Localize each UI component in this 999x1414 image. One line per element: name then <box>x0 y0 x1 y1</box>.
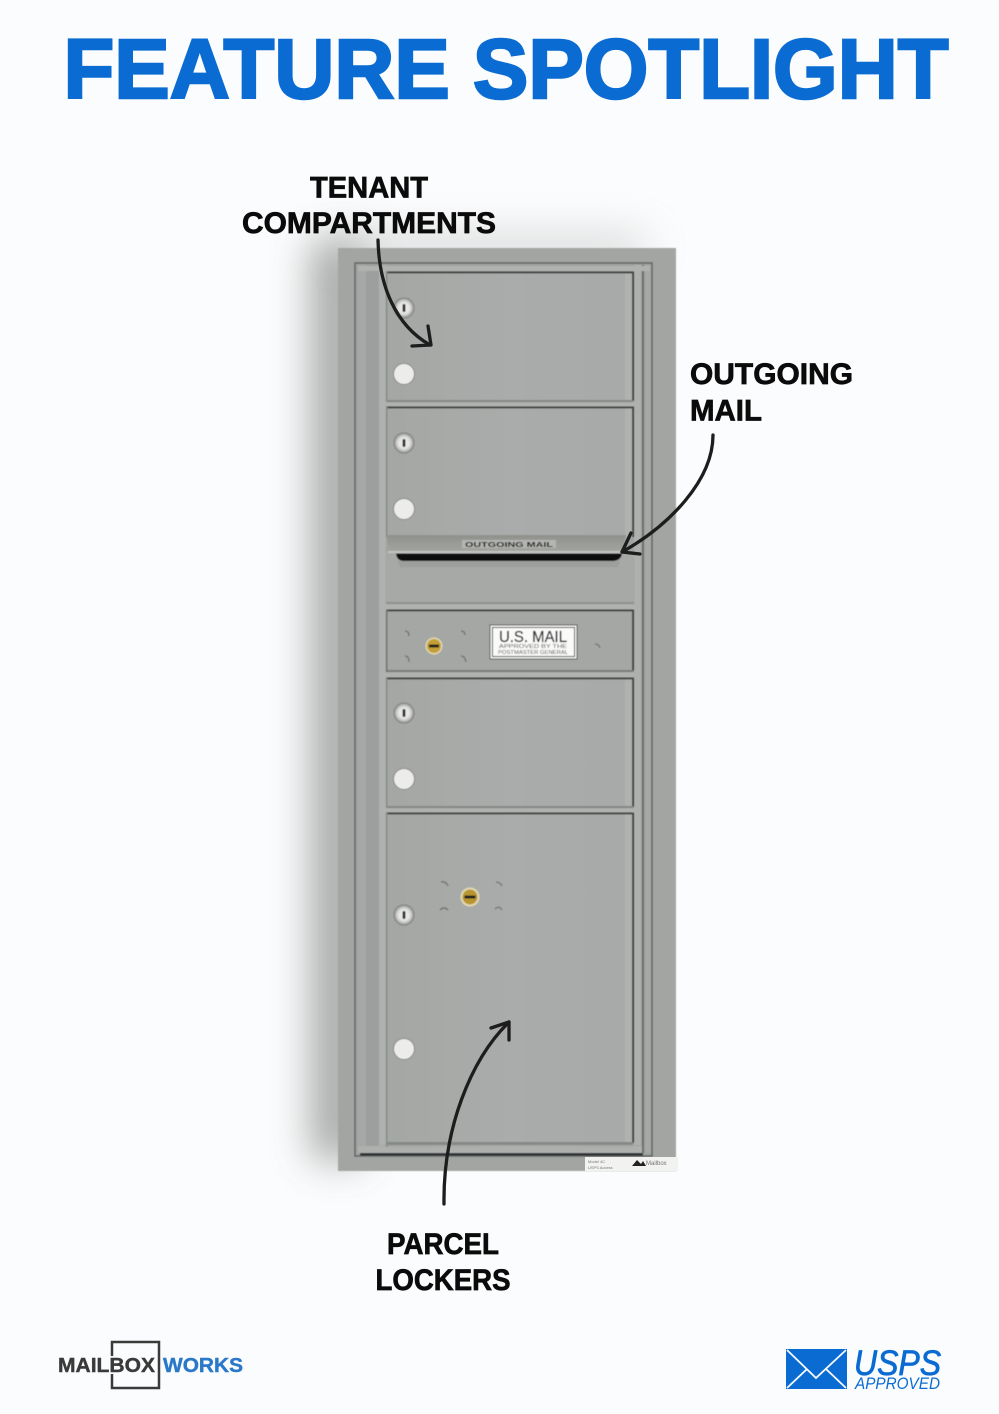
arrow: outgoing mail <box>622 435 713 554</box>
brass lock <box>460 888 480 906</box>
label: parcel lockers <box>376 1228 510 1297</box>
manufacturer label: Mailbox <box>646 1161 667 1167</box>
title: FEATURE SPOTLIGHT <box>64 22 948 116</box>
arrow: parcel lockers <box>444 1022 509 1204</box>
manufacturer label: USPS Access <box>588 1165 613 1170</box>
logo: Mailbox Works: WORKS <box>163 1355 243 1377</box>
logo: USPS Approved: APPROVED <box>854 1374 940 1393</box>
label: tenant compartments: COMPARTMENTS <box>242 207 496 240</box>
label: tenant compartments <box>242 172 496 240</box>
logo: USPS Approved <box>786 1344 941 1393</box>
label: tenant compartments: TENANT <box>310 172 428 204</box>
brass lock <box>426 638 442 654</box>
mailbox unit <box>312 236 678 1171</box>
doors and hardware <box>386 272 634 1147</box>
blank panel <box>386 553 634 604</box>
label: outgoing mail: MAIL <box>690 394 762 428</box>
U.S. Mail plate: U.S. MAIL <box>499 629 567 646</box>
logo: USPS Approved: USPS <box>854 1344 941 1383</box>
master access door <box>386 610 634 672</box>
label: outgoing mail <box>690 358 853 428</box>
outgoing mail slot: OUTGOING MAIL <box>465 540 554 549</box>
icon: envelope <box>786 1349 847 1389</box>
outgoing mail slot <box>386 535 626 567</box>
manufacturer label <box>585 1157 678 1171</box>
label: parcel lockers: LOCKERS <box>376 1264 510 1297</box>
parcel locker door <box>386 813 634 1147</box>
cabinet frame <box>338 248 676 1171</box>
label: parcel lockers: PARCEL <box>387 1228 499 1261</box>
tenant compartment door 1 <box>386 272 634 402</box>
logo: Mailbox Works <box>58 1342 243 1388</box>
tenant compartment door 2 <box>386 407 634 537</box>
logo: Mailbox Works: MAILBOX <box>58 1355 156 1377</box>
arrow: tenant compartments <box>378 240 431 346</box>
label: outgoing mail: OUTGOING <box>690 358 853 391</box>
manufacturer label: Model 4C <box>588 1159 605 1164</box>
rivets <box>405 631 600 662</box>
rivets <box>440 882 502 910</box>
U.S. Mail plate: POSTMASTER GENERAL <box>498 650 568 656</box>
tenant compartment door 3 <box>386 678 634 808</box>
U.S. Mail plate <box>490 625 577 659</box>
U.S. Mail plate: APPROVED BY THE <box>499 644 567 650</box>
